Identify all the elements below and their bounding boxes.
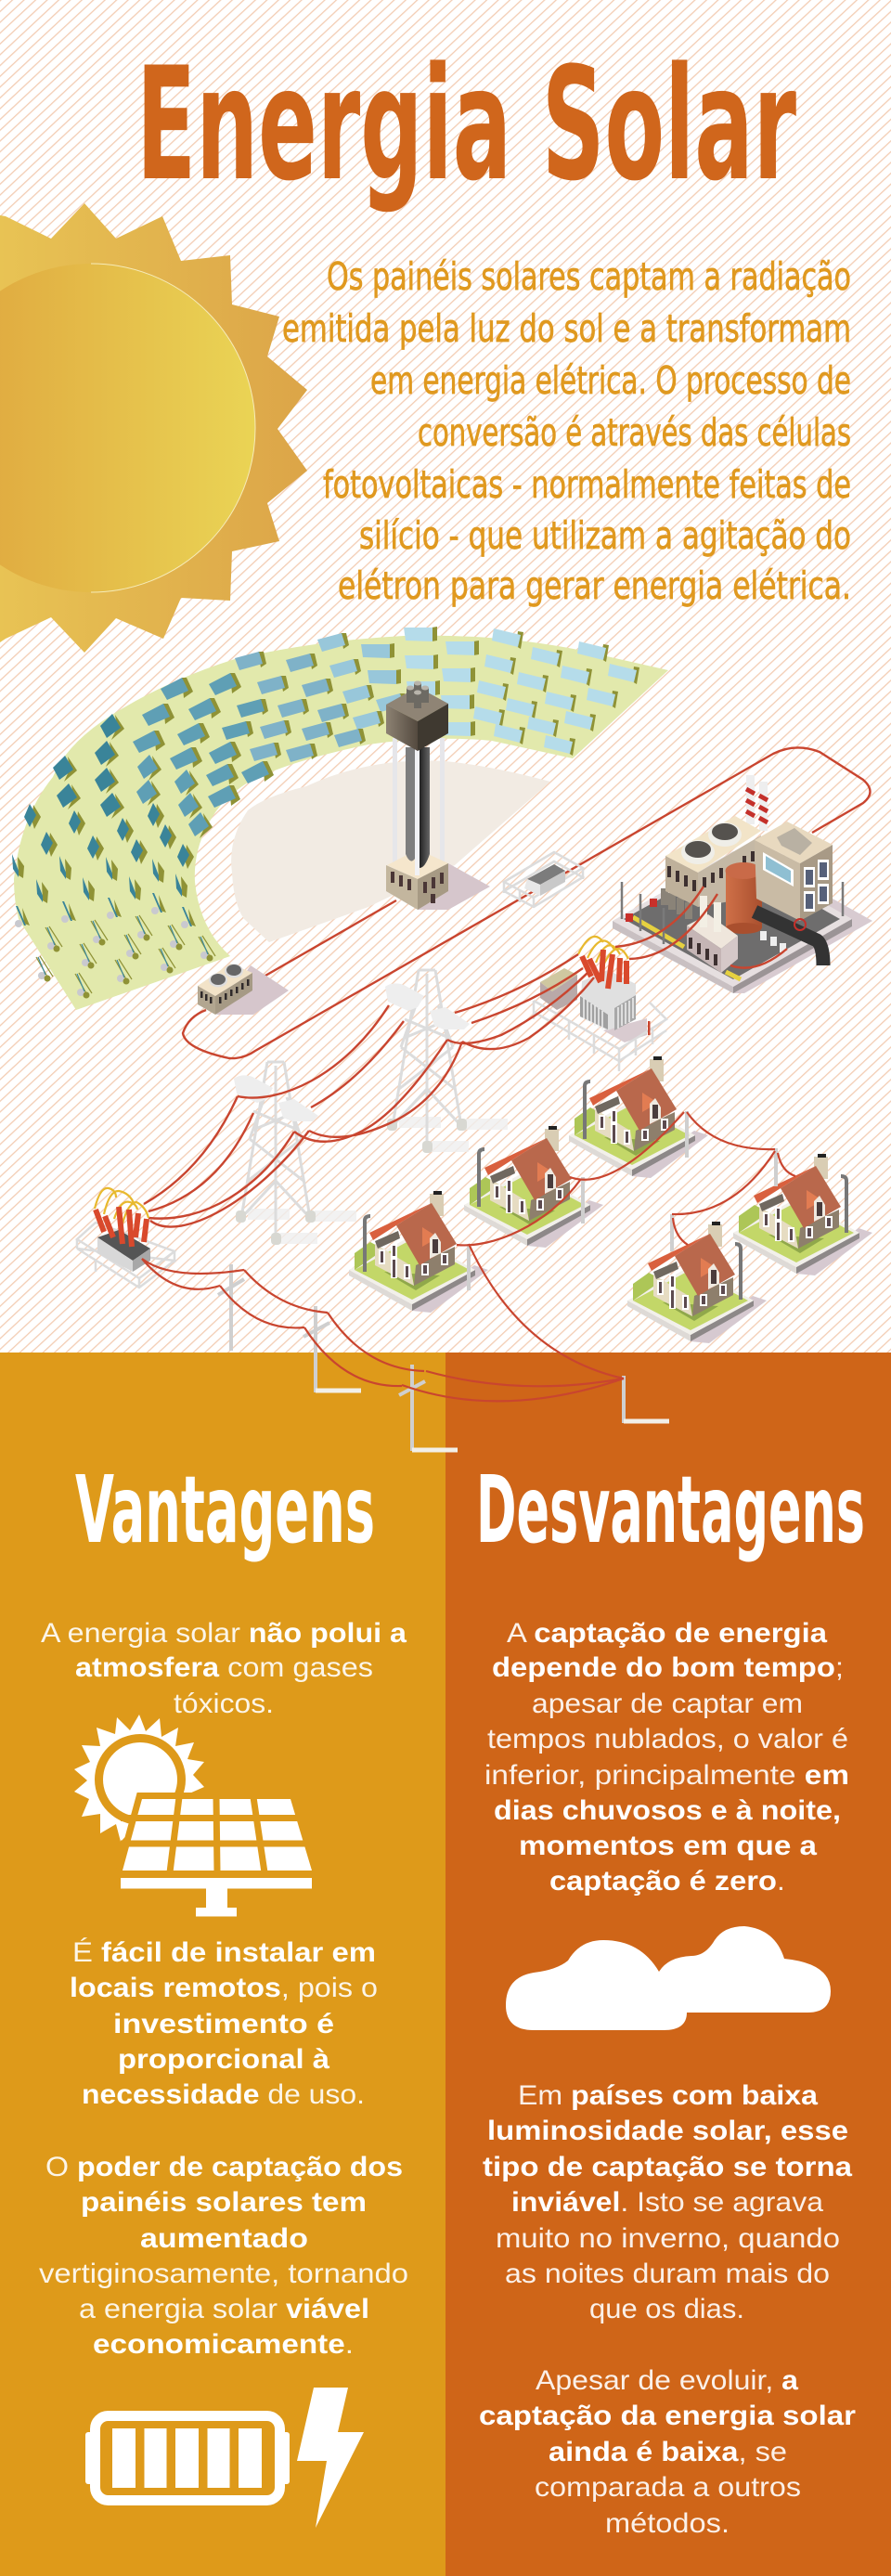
text: vantagem 2: necessidade de uso. [82,2079,365,2110]
icon: sun [0,203,307,653]
text: desvantagem 1: inferior, principalmente em [484,1760,849,1791]
railed box unit [504,852,583,908]
solar tower [386,681,490,910]
text: desvantagem 3 [479,2365,856,2539]
left transformer [77,1188,174,1288]
panel: vantagens background [0,1353,446,2576]
text: desvantagem 1: captação é zero . [549,1866,785,1896]
text: desvantagem 2: luminosidade solar, esse [487,2116,848,2146]
text: desvantagem 1 [484,1618,849,1896]
transmission towers [234,970,508,1245]
text: desvantagem 3: métodos. [605,2508,730,2539]
text: vantagem 2: investimento é [113,2009,334,2039]
neighbourhood wires [142,1112,795,1401]
text: vantagem 3: painéis solares tem [81,2187,367,2218]
background: striped paper [0,0,891,1353]
panel: desvantagens background [446,1353,891,2576]
text: desvantagem 1: A captação de energia [507,1618,827,1649]
wires: factory to substation and across towers [144,887,717,1227]
power plant [613,775,872,993]
text: desvantagem 2: que os dias. [589,2294,744,2324]
text: desvantagem 2: muito no inverno, quando [496,2223,840,2254]
text: desvantagem 1: depende do bom tempo ; [492,1652,844,1683]
text: vantagem 1: atmosfera com gases [75,1652,373,1683]
text: desvantagem 2 [483,2080,852,2324]
icon: sun and solar panel [74,1715,316,1916]
text: desvantagem 2: inviável. Isto se agrava [511,2187,823,2218]
text: vantagem 3: vertiginosamente, tornando [39,2259,408,2289]
text: desvantagem 3: captação da energia solar [479,2401,856,2431]
text: vantagem 3: aumentado [140,2223,308,2254]
text: vantagem 3 [39,2152,408,2360]
text: desvantagem 1: momentos em que a [519,1831,817,1861]
text: desvantagem 2: as noites duram mais do [505,2259,830,2289]
text: vantagem 3: O poder de captação dos [45,2152,403,2182]
text: desvantagem 1: dias chuvosos e à noite, [494,1795,841,1826]
text: vantagem 2: É fácil de instalar em [72,1937,376,1968]
utility poles [218,1111,776,1451]
icon: cloud [506,1926,831,2030]
intro text [282,254,851,608]
power wires: plant circuit [183,747,871,1058]
text: vantagem 3: economicamente . [93,2329,354,2360]
text: vantagem 1 [41,1618,407,1719]
beige ground under tower [231,760,550,942]
icon: battery and lightning bolt [85,2388,364,2528]
text: vantagem 2: locais remotos , pois o [70,1973,378,2003]
text: desvantagem 3: comparada a outros [535,2472,801,2503]
text: vantagem 3: a energia solar viável [79,2294,369,2324]
text: desvantagem 2: tipo de captação se torna [483,2152,852,2182]
text: vantagem 2: proporcional à [118,2044,329,2075]
text: desvantagem 1: apesar de captar em [532,1689,803,1719]
solar field: green ground with panels [12,627,668,1010]
text: desvantagem 3: ainda é baixa , se [549,2437,787,2467]
heading: vantagens: Vantagens [75,1456,375,1564]
text: vantagem 2 [70,1937,378,2110]
text: desvantagem 1: tempos nublados, o valor é [487,1724,848,1754]
text: desvantagem 3: Apesar de evoluir, a [536,2365,798,2396]
cooling unit box [198,964,289,1015]
text: desvantagem 2: Em países com baixa [518,2080,818,2111]
houses with street lamps [349,1056,872,1343]
text: vantagem 1: tóxicos. [174,1689,274,1719]
substation transformer [534,937,666,1071]
text: vantagem 1: A energia solar não polui a [41,1618,407,1649]
